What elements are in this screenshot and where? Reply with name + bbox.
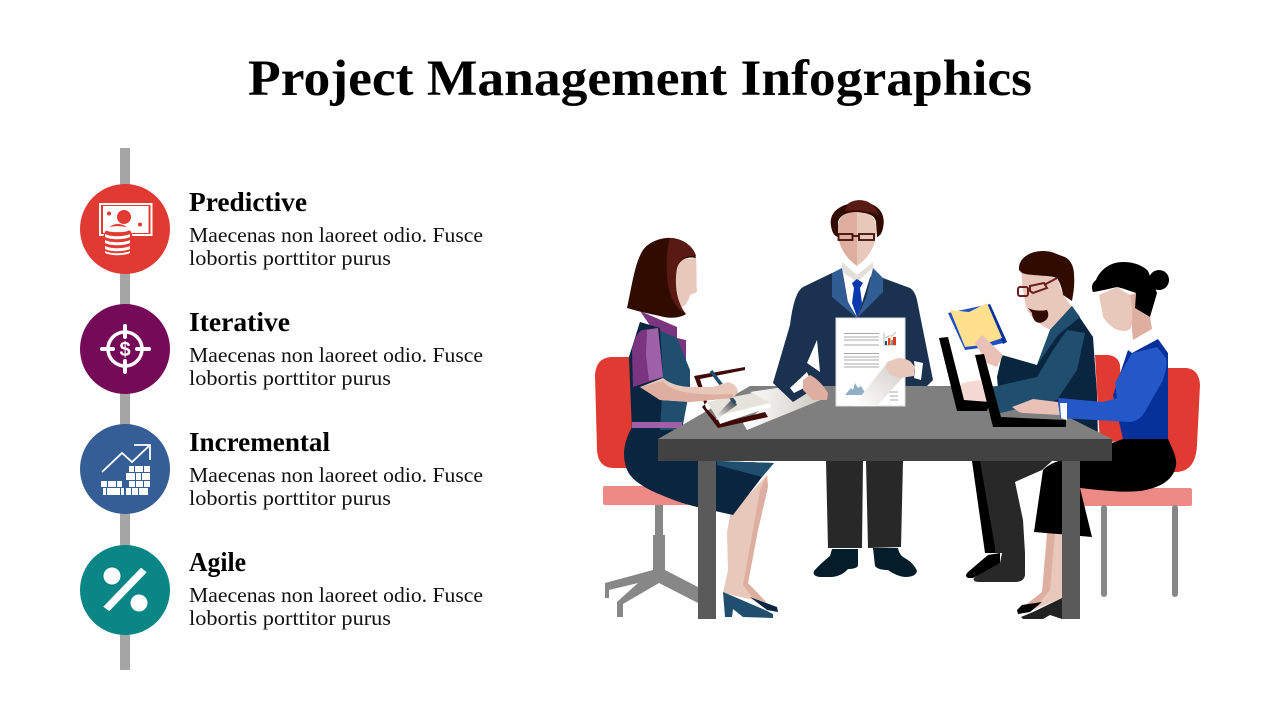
heading: Incremental [189,427,330,457]
pen [711,371,735,403]
heading: Predictive [189,187,307,217]
right hand and cuff [886,358,923,380]
clipboard with notes [694,367,828,430]
third person: man with beard, lower body and torso [966,251,1098,582]
item: Predictive [80,184,483,274]
description: lobortis porttitor purus [189,366,391,390]
description: Maecenas non laoreet odio. Fusce [189,223,483,247]
item: Iterative [80,304,483,394]
icon: growth chart over bricks [80,424,170,514]
icon: dollar target [80,304,170,394]
vertical connector bar [120,148,130,670]
description: Maecenas non laoreet odio. Fusce [189,463,483,487]
description [189,343,483,390]
icon: money and coins [80,184,170,274]
description: lobortis porttitor purus [189,486,391,510]
left woman arm [640,378,738,402]
description: Maecenas non laoreet odio. Fusce [189,583,483,607]
left woman: body [624,238,778,618]
description: lobortis porttitor purus [189,246,391,270]
heading: Iterative [189,307,290,337]
right woman arm and hand [1012,347,1167,422]
arm shadow over document [853,363,905,406]
man in suit: torso and legs [773,200,933,577]
area chart [845,383,868,395]
icon: percent [80,545,170,635]
left office chair [595,357,703,617]
mini bar chart [884,332,896,345]
description: lobortis porttitor purus [189,606,391,630]
hair bun [1149,270,1169,290]
right woman: legs, skirt and torso [1017,262,1169,619]
title: Project Management Infographics [248,51,1032,107]
item: Incremental [80,424,483,514]
laptops [939,337,1066,427]
right chairs [1075,355,1200,597]
right woman skirt [1034,439,1176,537]
description [189,583,483,630]
meeting table [658,386,1112,619]
description [189,223,483,270]
illustration: team meeting at a table [595,200,1200,619]
timeline list [80,148,483,670]
description: Maecenas non laoreet odio. Fusce [189,343,483,367]
report document [836,318,923,406]
man left sleeve, cuff and hand [773,345,828,402]
heading: Agile [189,547,246,577]
bearded man's reading book and arm [948,303,1085,413]
description [189,463,483,510]
icon: dollar target: $ [119,339,131,361]
item: Agile [80,545,483,635]
